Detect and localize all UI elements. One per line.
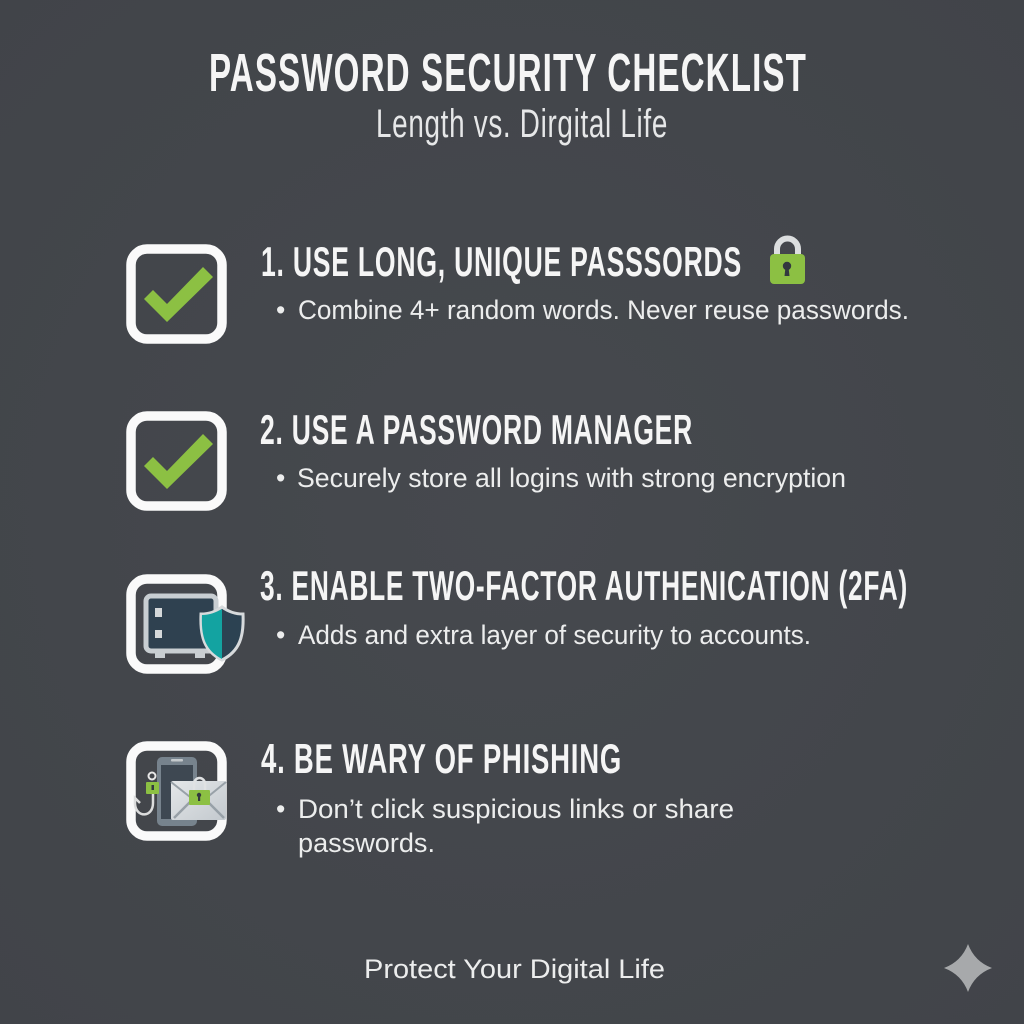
checklist item 4: Don’t click suspicious links or share xyxy=(298,794,734,824)
checklist item 1: Combine 4+ random words. Never reuse passwords. xyxy=(298,295,909,325)
icon: safe with shield xyxy=(131,579,243,669)
checklist item 4: passwords. xyxy=(298,828,435,858)
bullet text 3: • xyxy=(276,620,285,650)
bullet text 1: • xyxy=(276,295,285,325)
icon: sparkle watermark xyxy=(944,944,992,992)
checklist item 4 xyxy=(131,735,734,858)
checklist item 3 xyxy=(131,562,908,669)
checklist item 3: Adds and extra layer of security to accounts. xyxy=(298,620,811,650)
checklist item 2: Securely store all logins with strong encryption xyxy=(297,463,846,493)
bullet text 2: • xyxy=(276,463,285,493)
icon: green padlock xyxy=(770,239,805,284)
icon: green check box 1 xyxy=(131,249,222,339)
footer tagline: Protect Your Digital Life xyxy=(364,954,665,984)
icon: green check box 2 xyxy=(131,416,222,506)
subtitle: Length vs. Dirgital Life xyxy=(376,102,668,146)
checklist item 1 xyxy=(131,238,909,339)
icon: phishing phone and envelope xyxy=(131,746,226,836)
checklist item 2 xyxy=(131,406,846,506)
heading 4: 4. BE WARY OF PHISHING xyxy=(261,735,622,782)
heading 2: 2. USE A PASSWORD MANAGER xyxy=(260,406,693,453)
heading 1: 1. USE LONG, UNIQUE PASSSORDS xyxy=(261,238,742,285)
bullet text 4: • xyxy=(276,794,285,824)
